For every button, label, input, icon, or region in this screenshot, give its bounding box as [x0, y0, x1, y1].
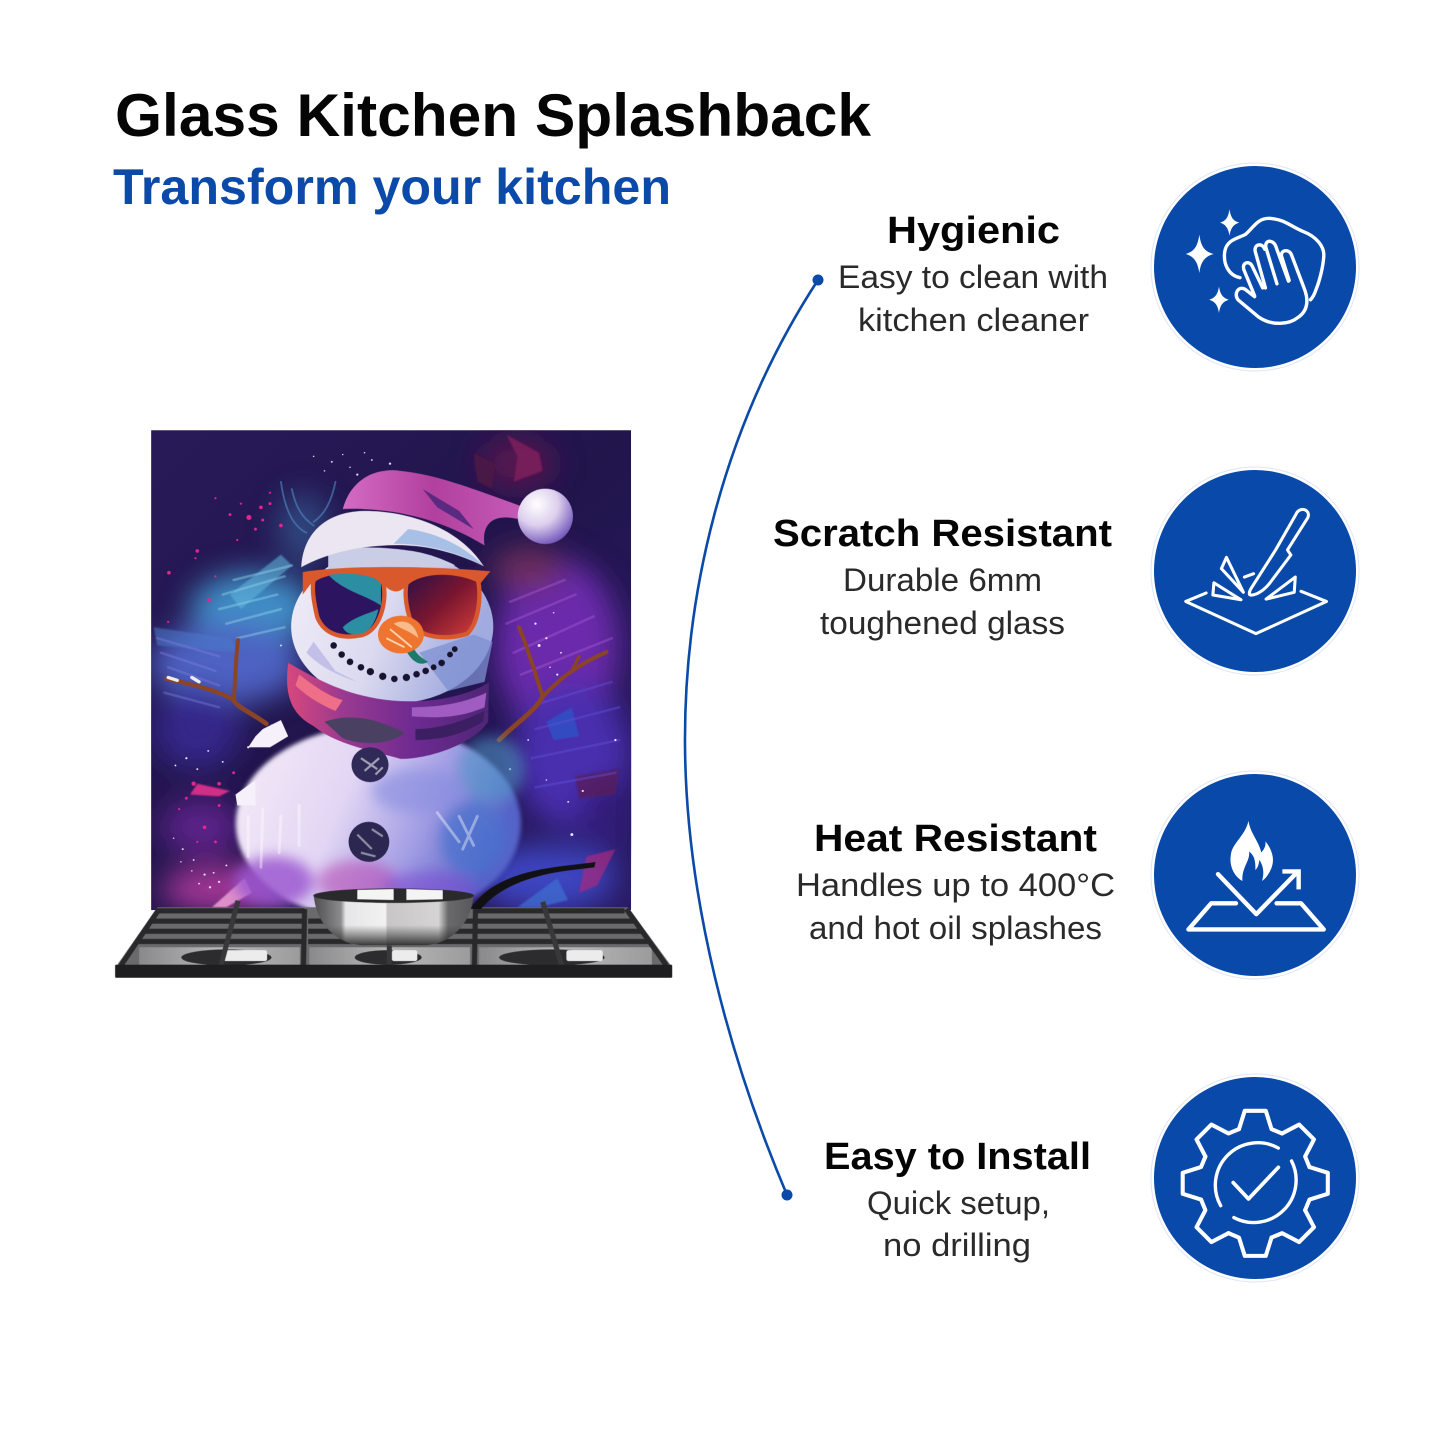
pan [313, 862, 595, 945]
feature: scratch resistant: Scratch Resistant [773, 513, 1112, 555]
arm: left twig [166, 640, 266, 724]
arm: right twig [499, 627, 606, 740]
feature: heat resistant [796, 818, 1115, 946]
curve bottom dot [782, 1190, 792, 1200]
pan bowl [314, 895, 474, 945]
feature: scratch resistant: Durable 6mm [843, 562, 1042, 598]
product image: snowman splashback above gas hob [115, 430, 672, 978]
hob burners [181, 949, 605, 965]
pan rim highlights [357, 889, 443, 900]
hob front edge [115, 965, 672, 978]
hat pompom [518, 489, 573, 544]
panel: splashback artwork [150, 430, 631, 922]
streak texture [157, 482, 619, 787]
hat [301, 470, 525, 567]
connector curve [685, 274, 824, 1200]
button: lower [349, 822, 389, 862]
icon: flame on heated surface [1151, 771, 1359, 979]
button: upper [351, 747, 389, 782]
feature: hygienic: kitchen cleaner [858, 302, 1089, 338]
brush strokes [154, 435, 619, 907]
icon: knife scratching glass [1151, 467, 1359, 675]
sunglasses right lens [406, 572, 479, 637]
feature: scratch resistant: toughened glass [820, 605, 1065, 641]
feature: hygienic: Easy to clean with [838, 259, 1108, 295]
infographic canvas [114, 92, 1360, 1282]
smile dots [330, 642, 458, 682]
feature: easy to install: Easy to Install [824, 1136, 1091, 1178]
feature: easy to install [824, 1136, 1091, 1263]
curve top dot [812, 274, 824, 286]
gas hob [115, 901, 672, 978]
sunglasses top bar [303, 567, 490, 595]
hob grates [121, 909, 666, 965]
feature: easy to install: Quick setup, [867, 1185, 1050, 1221]
nose [378, 616, 424, 653]
left lens reflections [328, 572, 381, 634]
icon: gear with check mark [1151, 1074, 1359, 1282]
icon: hand wiping with sparkles [1151, 163, 1359, 371]
snowman body [234, 720, 525, 922]
title: Glass Kitchen Splashback [115, 82, 872, 149]
sunglasses left lens [313, 572, 384, 637]
hob support bars [221, 901, 562, 965]
snowman head [291, 547, 493, 704]
feature: heat resistant: Handles up to 400°C [796, 867, 1115, 903]
hob burner plates [139, 947, 652, 965]
feature: easy to install: no drilling [883, 1227, 1031, 1263]
pan rim [313, 888, 474, 903]
feature: heat resistant: Heat Resistant [814, 818, 1097, 860]
feature: hygienic: Hygienic [887, 210, 1060, 252]
feature: hygienic [838, 210, 1108, 338]
feature: scratch resistant [773, 513, 1112, 641]
paint splatter [167, 492, 315, 843]
subtitle: Transform your kitchen [113, 159, 671, 215]
pan handle [470, 862, 595, 909]
feature: heat resistant: and hot oil splashes [809, 910, 1102, 946]
sunglasses [303, 567, 490, 637]
scarf [287, 663, 489, 759]
